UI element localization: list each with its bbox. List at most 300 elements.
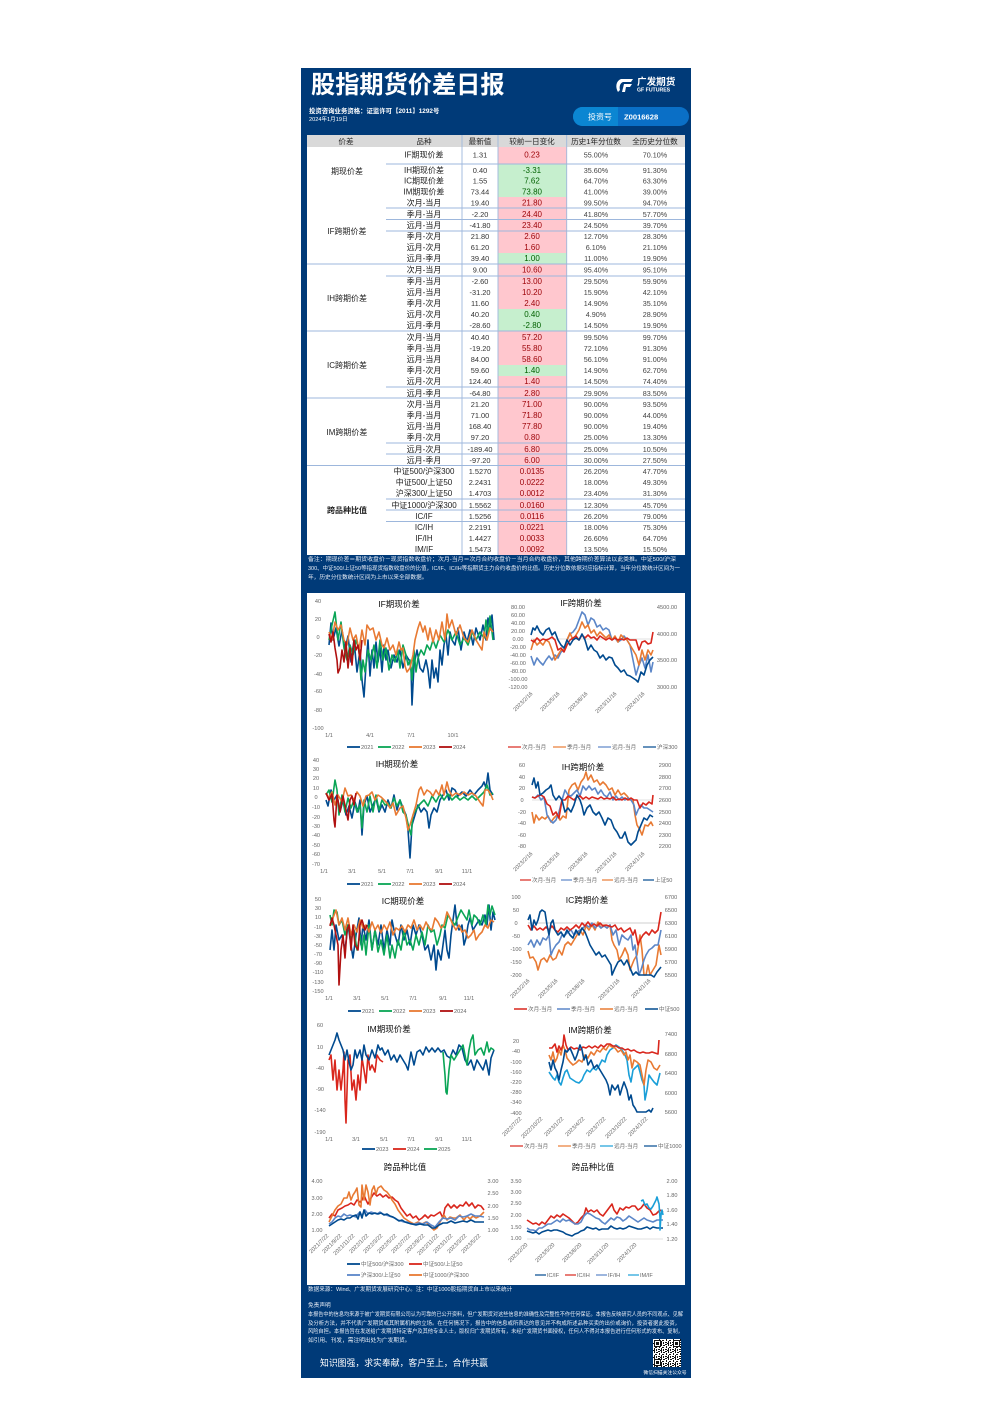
rows: IM calendar spreads: 季月-当月 — [407, 410, 441, 420]
chart: IM calendar spreads: -400 — [510, 1111, 522, 1117]
rows: cross-product ratios: 49.30% — [643, 478, 668, 487]
rows: cross-product ratios: 0.0033 — [520, 534, 545, 543]
legend: 远月-当月 — [614, 1142, 638, 1150]
chart: IM calendar spreads: -160 — [510, 1070, 522, 1076]
disclaimer: 如引用、刊发，需注明出处为广发期货。 — [308, 1336, 410, 1344]
rows: IF calendar spreads: 2.60 — [524, 232, 540, 241]
chart: IC basis: -70 — [314, 952, 322, 958]
rows: cross-product ratios: 1.5473 — [469, 545, 491, 554]
chart: IH calendar spreads: 2500 — [659, 810, 671, 816]
rows: cross-product ratios: 1.5256 — [469, 512, 491, 521]
legend: 远月-当月 — [612, 743, 636, 751]
chart: cross-product ratios, spot indices: 2021/7/22 — [309, 1233, 330, 1255]
rows: cross-product ratios: 中证1000/沪深300 — [391, 500, 457, 510]
chart: cross-product ratios, futures: 1.40 — [667, 1222, 677, 1228]
panel: report background — [301, 68, 691, 1378]
chart: IH basis: 5/1 — [378, 869, 386, 875]
chart: IM basis: 7/1 — [407, 1137, 415, 1143]
chart: IC basis: -130 — [312, 980, 324, 986]
rows: cross-product ratios: 2.2431 — [469, 478, 491, 487]
chart: IF calendar spreads: 2023/5/16 — [540, 691, 561, 713]
chart: IM basis: -40 — [316, 1066, 324, 1072]
category labels: 期现价差 — [331, 166, 363, 176]
chart: IM calendar spreads: 6000 — [665, 1091, 677, 1097]
chart: IC calendar spreads — [510, 895, 680, 1013]
legend: 2022 — [393, 1009, 405, 1015]
rows: IC calendar spreads: 29.90% — [584, 389, 609, 398]
legend: 中证500/上证50 — [423, 1260, 462, 1268]
rows: IF calendar spreads: 19.90% — [643, 254, 668, 263]
chart: IH basis: -50 — [312, 843, 320, 849]
chart: IH basis: 3/1 — [348, 869, 356, 875]
chart: cross-product ratios, futures: 2023/5/20 — [535, 1242, 556, 1264]
chart: IH basis: 20 — [313, 776, 319, 782]
rows: IH calendar spreads: 0.40 — [524, 310, 540, 319]
chart: cross-product ratios, spot indices — [309, 1162, 498, 1279]
legend: 2024 — [453, 882, 465, 888]
rows: IF calendar spreads: -2.20 — [472, 210, 488, 219]
chart: IM basis: -140 — [314, 1108, 326, 1114]
rows: IH calendar spreads: -28.60 — [470, 321, 490, 330]
legend: 2024 — [454, 1009, 466, 1015]
rows: cross-product ratios: 23.40% — [584, 489, 609, 498]
row: IM basis: 73.80 — [522, 188, 543, 196]
row: IC basis: IC期现价差 — [404, 176, 444, 186]
chart: IH basis: -40 — [312, 833, 320, 839]
rows: IF calendar spreads: -41.80 — [470, 221, 490, 230]
table note: 备注：期现价差＝期货收盘价－现货指数收盘价；次月-当月＝次月合约收盘价－当月合约收盘价，其他跨期价差算法以此类推。中证500/沪深 — [308, 555, 676, 563]
rows: cross-product ratios: 0.0116 — [520, 512, 544, 521]
chart: IC calendar spreads: 2023/5/16 — [538, 978, 559, 1000]
rows: IM calendar spreads: 77.80 — [522, 422, 543, 431]
row: IM basis — [404, 186, 668, 196]
chart: IC calendar spreads: 5500 — [665, 973, 677, 979]
rows: cross-product ratios: 79.00% — [643, 512, 668, 521]
chart: IF calendar spreads: 2023/11/16 — [595, 691, 618, 715]
legend: 中证500 — [659, 1005, 680, 1013]
rows: IM calendar spreads: 90.00% — [584, 400, 609, 409]
rows: IC calendar spreads: 72.10% — [584, 344, 609, 353]
chart: IH calendar spreads: 40 — [519, 775, 525, 781]
rows: IH calendar spreads: 35.10% — [643, 299, 668, 308]
table header: 品种 — [416, 136, 432, 146]
rows: IH calendar spreads — [407, 264, 668, 330]
chart: IM calendar spreads: 2023/1/22 — [544, 1116, 565, 1138]
rows: IH calendar spreads: 59.90% — [643, 277, 668, 286]
rows: IH calendar spreads: 2.40 — [524, 299, 540, 308]
rows: IH calendar spreads: 远月-次月 — [407, 309, 441, 319]
legend: 次月-当月 — [524, 1142, 548, 1150]
chart: IH basis: 9/1 — [435, 869, 443, 875]
chart: cross-product ratios, futures: 1.00 — [511, 1236, 521, 1242]
rows: IC calendar spreads: 58.60 — [522, 355, 543, 364]
rows: IH calendar spreads: 15.90% — [584, 288, 609, 297]
category labels: IH跨期价差 — [327, 293, 367, 303]
rows: IF calendar spreads: 远月-季月 — [407, 253, 441, 263]
rows: IF calendar spreads: 19.40 — [471, 198, 489, 208]
rows: IC calendar spreads: 季月-当月 — [407, 343, 441, 353]
rows: IF calendar spreads: 6.10% — [586, 243, 607, 252]
rows: IF calendar spreads: 39.70% — [643, 221, 668, 230]
row: IF basis — [404, 150, 668, 160]
legend: 2023 — [423, 745, 435, 751]
chart: IC calendar spreads: 5900 — [665, 947, 677, 953]
chart: cross-product ratios, spot indices: 2022/9/22 — [405, 1233, 426, 1255]
rows: IC calendar spreads: 1.40 — [524, 377, 540, 386]
rows: cross-product ratios: 1.5562 — [469, 501, 491, 510]
chart: IC calendar spreads: 2023/11/16 — [598, 978, 621, 1002]
chart: cross-product ratios, spot indices: 2022/3/22 — [363, 1233, 384, 1255]
chart: IH basis: 0 — [314, 795, 318, 801]
rows: IC calendar spreads: 83.50% — [643, 389, 668, 398]
legend — [347, 745, 465, 751]
chart: IC basis: -90 — [314, 961, 322, 967]
chart: IH calendar spreads: IH跨期价差 — [562, 762, 604, 772]
rows: IC calendar spreads: 远月-当月 — [407, 354, 441, 364]
chart: IH basis: -10 — [312, 805, 320, 811]
chart: IC basis: 30 — [315, 906, 321, 912]
chart: IF basis: 1/1 — [325, 733, 333, 739]
title: 股指期货价差日报 — [311, 72, 505, 99]
rows: cross-product ratios: 1.5270 — [469, 467, 491, 476]
chart: IF basis: -40 — [314, 672, 322, 678]
rows: IF calendar spreads: 94.70% — [643, 198, 668, 208]
chart: IF basis: -20 — [314, 653, 322, 659]
chart: IM calendar spreads: 5600 — [665, 1110, 677, 1116]
chart: cross-product ratios, spot indices: 2023/1/22 — [433, 1233, 454, 1255]
rows: IF calendar spreads: 39.40 — [471, 254, 489, 263]
rows: IC calendar spreads: 远月-季月 — [407, 388, 441, 398]
rows: IC calendar spreads: 99.50% — [584, 333, 609, 342]
chart: IH basis: -20 — [312, 815, 320, 821]
rows: IM calendar spreads: 10.50% — [643, 445, 668, 454]
legend: 2024 — [453, 745, 465, 751]
disclaimer: 及分析方法，并不代表广发期货或其附属机构的立场。在任何情况下，报告中的信息或所表达的意见并不构成所述品种买卖的出价或询价，投资者据此投资， — [308, 1319, 680, 1327]
legend: 远月-当月 — [614, 876, 638, 884]
chart: IH calendar spreads: -40 — [518, 821, 526, 827]
chart: IM calendar spreads: -220 — [510, 1080, 522, 1086]
rows: IF calendar spreads: 61.20 — [471, 243, 489, 252]
chart: IF basis — [312, 599, 494, 751]
chart: IF calendar spreads: 4000.00 — [657, 632, 677, 638]
chart: IF calendar spreads: 3500.00 — [657, 658, 677, 664]
rows: IM calendar spreads: 30.00% — [584, 456, 609, 465]
rows: IF calendar spreads: 28.30% — [643, 232, 668, 241]
rows: IC calendar spreads: 季月-次月 — [407, 365, 441, 375]
rows: IF calendar spreads: 23.40 — [522, 221, 543, 230]
rows: IM calendar spreads: 6.80 — [524, 445, 540, 454]
chart: IF basis: 40 — [315, 599, 321, 605]
rows: cross-product ratios: 13.50% — [584, 545, 609, 554]
chart: cross-product ratios, spot indices: 2022/7/22 — [391, 1233, 412, 1255]
rows: cross-product ratios: 12.30% — [584, 501, 609, 510]
category labels — [327, 166, 367, 515]
row: IH basis: -3.31 — [523, 166, 542, 175]
chart: IH calendar spreads: 2300 — [659, 833, 671, 839]
chart: IM calendar spreads: 2023/7/22 — [586, 1116, 607, 1138]
chart: cross-product ratios, spot indices: 2021/9/22 — [322, 1233, 343, 1255]
chart: IM calendar spreads: -340 — [510, 1100, 522, 1106]
rows: cross-product ratios: 沪深300/上证50 — [396, 488, 453, 498]
rows: IC calendar spreads: 远月-次月 — [407, 376, 441, 386]
chart: IC basis: -150 — [312, 989, 324, 995]
chart: IC basis: -50 — [314, 943, 322, 949]
chart: IC basis: 9/1 — [439, 996, 447, 1002]
chart: IM basis: -190 — [314, 1130, 326, 1136]
legend — [535, 1273, 653, 1279]
rows: IH calendar spreads: 远月-当月 — [407, 287, 441, 297]
QR caption: 微信扫描关注公众号 — [643, 1369, 687, 1376]
rows: IM calendar spreads: 远月-次月 — [407, 444, 441, 454]
chart: IC calendar spreads: 0 — [514, 921, 518, 927]
chart: cross-product ratios, spot indices: 1.00 — [488, 1228, 498, 1234]
rows: IM calendar spreads: 25.00% — [584, 445, 609, 454]
chart: IC basis: IC期现价差 — [382, 896, 424, 906]
rows: IC calendar spreads: 62.70% — [643, 366, 668, 375]
rows: IF calendar spreads: 21.10% — [643, 243, 668, 252]
chart: cross-product ratios, spot indices: 跨品种比值 — [384, 1162, 427, 1172]
rows: IF calendar spreads: 1.00 — [524, 254, 540, 263]
rows: cross-product ratios: 0.0221 — [520, 523, 545, 532]
legend: 沪深300 — [657, 743, 678, 751]
chart: IC basis: 3/1 — [353, 996, 361, 1002]
rows: IH calendar spreads: 28.90% — [643, 310, 668, 319]
row: IF basis: 1.31 — [473, 150, 487, 160]
chart: cross-product ratios, futures: 3.00 — [511, 1190, 521, 1196]
rows: cross-product ratios: 18.00% — [584, 478, 609, 487]
legend: 上证50 — [655, 876, 672, 884]
chart: IH calendar spreads: -60 — [518, 833, 526, 839]
chart: IC basis: 1/1 — [325, 996, 333, 1002]
analyst badge — [573, 107, 689, 126]
chart: cross-product ratios, spot indices: 2021/11/22 — [333, 1233, 356, 1257]
legend: 远月-当月 — [614, 1005, 638, 1013]
legend: IF/IH — [608, 1273, 620, 1279]
data source note: 数据来源：Wind、广发期货发展研究中心。注：中证1000股指期货自上市以来统计 — [308, 1285, 513, 1293]
rows: IC calendar spreads: 99.70% — [643, 333, 668, 342]
chart: cross-product ratios, futures: 2023/11/20 — [587, 1242, 610, 1266]
rows: IH calendar spreads: -31.20 — [470, 288, 490, 297]
rows: cross-product ratios: 0.0092 — [520, 545, 545, 554]
legend: 2025 — [438, 1147, 450, 1153]
rows: IM calendar spreads: 97.20 — [471, 433, 489, 442]
chart: IC basis: 11/1 — [464, 996, 474, 1002]
rows: IM calendar spreads: 44.00% — [643, 411, 668, 420]
chart: cross-product ratios, futures: 2023/2/20 — [508, 1242, 529, 1264]
chart: cross-product ratios, spot indices: 4.00 — [312, 1179, 322, 1185]
chart: IM basis: 11/1 — [462, 1137, 472, 1143]
logo: GF Futures: GF FUTURES — [637, 88, 671, 94]
chart: IF calendar spreads — [508, 598, 678, 751]
rows: IM calendar spreads: 远月-当月 — [407, 421, 441, 431]
chart: IF basis: 7/1 — [407, 733, 415, 739]
logo: GF Futures — [616, 76, 676, 94]
rows: cross-product ratios: 2.2191 — [469, 523, 491, 532]
rows: IH calendar spreads: 10.20 — [522, 288, 543, 297]
rows: IH calendar spreads: 19.90% — [643, 321, 668, 330]
chart: IC calendar spreads: 6700 — [665, 895, 677, 901]
rows: cross-product ratios: 26.20% — [584, 512, 609, 521]
legend: 2021 — [362, 1009, 374, 1015]
legend: 2022 — [392, 882, 404, 888]
rows: IH calendar spreads: 4.90% — [586, 310, 607, 319]
rows: IH calendar spreads: 14.50% — [584, 321, 609, 330]
legend — [347, 882, 465, 888]
row: IH basis: 35.60% — [584, 166, 609, 175]
rows: IM calendar spreads: 168.40 — [469, 422, 491, 431]
chart: IF calendar spreads: 60.00 — [511, 613, 525, 619]
rows: IH calendar spreads: 11.60 — [471, 299, 489, 308]
chart: IH calendar spreads: 2400 — [659, 821, 671, 827]
rows: IF calendar spreads: 季月-当月 — [407, 209, 441, 219]
chart: cross-product ratios, futures: 2.50 — [511, 1201, 521, 1207]
legend: 2023 — [423, 882, 435, 888]
legend: 2021 — [361, 745, 373, 751]
rows: IC calendar spreads: 次月-当月 — [407, 332, 441, 342]
rows: IF calendar spreads: 远月-次月 — [407, 242, 441, 252]
chart: IC basis: 7/1 — [409, 996, 417, 1002]
rows: cross-product ratios: 1.4703 — [469, 489, 491, 498]
rows: IM calendar spreads: 90.00% — [584, 411, 609, 420]
rows: IF calendar spreads: 季月-次月 — [407, 231, 441, 241]
table header — [307, 135, 685, 147]
legend: 次月-当月 — [532, 876, 556, 884]
legend: 2024 — [407, 1147, 419, 1153]
chart: IF calendar spreads: 40.00 — [511, 621, 525, 627]
rows: cross-product ratios: IF/IH — [415, 534, 433, 543]
rows: IF calendar spreads: 99.50% — [584, 198, 609, 208]
table header: 历史1年分位数 — [571, 136, 621, 146]
rows: cross-product ratios: 31.30% — [643, 489, 668, 498]
chart: cross-product ratios, spot indices: 2.00 — [312, 1212, 322, 1218]
rows: IM calendar spreads: 21.20 — [471, 400, 489, 409]
chart: IC calendar spreads: -100 — [510, 947, 522, 953]
rows: IC calendar spreads: 124.40 — [469, 377, 491, 386]
rows: IM calendar spreads: -97.20 — [470, 456, 490, 465]
chart: IH basis: 11/1 — [462, 869, 472, 875]
chart: IH calendar spreads: -20 — [518, 810, 526, 816]
row: IM basis: 73.44 — [471, 188, 489, 196]
rows: IF calendar spreads: 远月-当月 — [407, 220, 441, 230]
legend: 季月-当月 — [571, 1005, 595, 1013]
row: IF basis: 55.00% — [584, 150, 609, 160]
disclaimer: 风险自担。本报告旨在发送给广发期货特定客户及其他专业人士，版权归广发期货所有，未经广发期货书面授权，任何人不得对本报告进行任何形式的发布、复制， — [308, 1327, 683, 1335]
chart: cross-product ratios, spot indices: 3.00 — [488, 1179, 498, 1185]
rows: IH calendar spreads: 10.60 — [522, 266, 543, 274]
legend: 季月-当月 — [573, 876, 597, 884]
rows: IM calendar spreads: -189.40 — [467, 445, 493, 454]
rows: IC calendar spreads: 84.00 — [471, 355, 489, 364]
chart: IM calendar spreads: -100 — [510, 1060, 522, 1066]
rows: IH calendar spreads: 95.10% — [643, 266, 668, 274]
chart: IH calendar spreads: 60 — [519, 763, 525, 769]
chart: cross-product ratios, spot indices: 2022/1/22 — [349, 1233, 370, 1255]
chart: IM basis: 10 — [317, 1045, 323, 1051]
chart: IC calendar spreads: -150 — [510, 960, 522, 966]
chart: IH basis: -60 — [312, 852, 320, 858]
rows: IM calendar spreads: 71.00 — [522, 400, 543, 409]
chart: IH calendar spreads: 2023/5/16 — [540, 851, 561, 873]
rows: IC calendar spreads: 56.10% — [584, 355, 609, 364]
rows: IH calendar spreads: 次月-当月 — [407, 264, 441, 274]
chart: IC basis: -30 — [314, 934, 322, 940]
chart: IM calendar spreads: 2022/7/22 — [502, 1116, 523, 1138]
legend — [520, 876, 672, 884]
chart: IH calendar spreads: 2700 — [659, 786, 671, 792]
rows: cross-product ratios — [391, 466, 668, 554]
row: IC basis: 64.70% — [584, 176, 609, 186]
legend: IC/IF — [547, 1273, 560, 1279]
chart: IF calendar spreads: 2023/2/16 — [513, 691, 534, 713]
chart: IF calendar spreads: 2023/8/16 — [568, 691, 589, 713]
chart: cross-product ratios, futures: 1.50 — [511, 1225, 521, 1231]
rows: IH calendar spreads: 远月-季月 — [407, 320, 441, 330]
legend: 2021 — [361, 882, 373, 888]
chart: IC calendar spreads: -50 — [512, 934, 520, 940]
chart: cross-product ratios, spot indices: 2023/5/22 — [461, 1233, 482, 1255]
chart: IM calendar spreads: 6400 — [665, 1071, 677, 1077]
rows: IM calendar spreads: 13.30% — [643, 433, 668, 442]
row: IC basis: 1.55 — [473, 176, 487, 186]
chart: IH basis: 30 — [313, 767, 319, 773]
chart: IH calendar spreads: 2023/11/16 — [595, 851, 618, 875]
table note: 300、中证500/上证50等指现货指数收盘价的比值，IC/IF、IC/IH等指期货主力合约收盘价的比值。历史分位数依据对应指标计算，当年分位数统计区间为一 — [308, 564, 680, 572]
chart: IM calendar spreads: -280 — [510, 1090, 522, 1096]
row: IH basis: 91.30% — [643, 166, 668, 175]
rows: IF calendar spreads: 12.70% — [584, 232, 609, 241]
chart: IH calendar spreads: 2800 — [659, 775, 671, 781]
chart: IH calendar spreads: 2600 — [659, 798, 671, 804]
chart: IM basis: 5/1 — [380, 1137, 388, 1143]
legend: 沪深300/上证50 — [361, 1271, 400, 1279]
chart: cross-product ratios, futures: 1.60 — [667, 1208, 677, 1214]
chart: cross-product ratios, spot indices: 3.00 — [312, 1196, 322, 1202]
rows: IC calendar spreads: -19.20 — [470, 344, 490, 353]
chart: IC calendar spreads: 6300 — [665, 921, 677, 927]
chart: IC calendar spreads: 5700 — [665, 960, 677, 966]
rows: IF calendar spreads: 次月-当月 — [407, 198, 441, 208]
chart: IF calendar spreads: 3000.00 — [657, 685, 677, 691]
rows: cross-product ratios: 18.00% — [584, 523, 609, 532]
chart: IF calendar spreads: -20.00 — [510, 645, 526, 651]
analyst badge: 投资号 — [588, 112, 612, 122]
chart: cross-product ratios, futures: 2024/1/20 — [617, 1242, 638, 1264]
rows: cross-product ratios: IC/IF — [415, 512, 433, 521]
chart: IF calendar spreads: 80.00 — [511, 605, 525, 611]
chart: IF basis: 0 — [316, 635, 320, 641]
rows: IH calendar spreads: 13.00 — [522, 277, 543, 286]
chart: IF calendar spreads: 2024/1/16 — [625, 691, 646, 713]
slogan: 知识图强，求实奉献，客户至上，合作共赢 — [320, 1357, 488, 1368]
rows: IM calendar spreads: 6.00 — [524, 456, 540, 465]
legend: 中证1000/沪深300 — [423, 1271, 469, 1279]
rows: IC calendar spreads: -64.80 — [470, 389, 490, 398]
rows: IM calendar spreads: 季月-次月 — [407, 432, 441, 442]
rows: IH calendar spreads: -2.60 — [472, 277, 488, 286]
rows: IC calendar spreads: 1.40 — [524, 366, 540, 375]
legend — [510, 1142, 682, 1150]
row: IH basis — [404, 165, 668, 175]
rows: IF calendar spreads: 24.40 — [522, 210, 543, 219]
rows: IC calendar spreads: 57.20 — [522, 333, 543, 342]
category labels: 跨品种比值 — [327, 505, 367, 515]
rows: IH calendar spreads: -2.80 — [523, 321, 542, 330]
rows: IF calendar spreads: 24.50% — [584, 221, 609, 230]
chart: IC calendar spreads: 2023/8/16 — [565, 978, 586, 1000]
rows: cross-product ratios: 26.60% — [584, 534, 609, 543]
row: IF basis: 0.23 — [524, 150, 540, 160]
table header: 全历史分位数 — [632, 136, 678, 146]
